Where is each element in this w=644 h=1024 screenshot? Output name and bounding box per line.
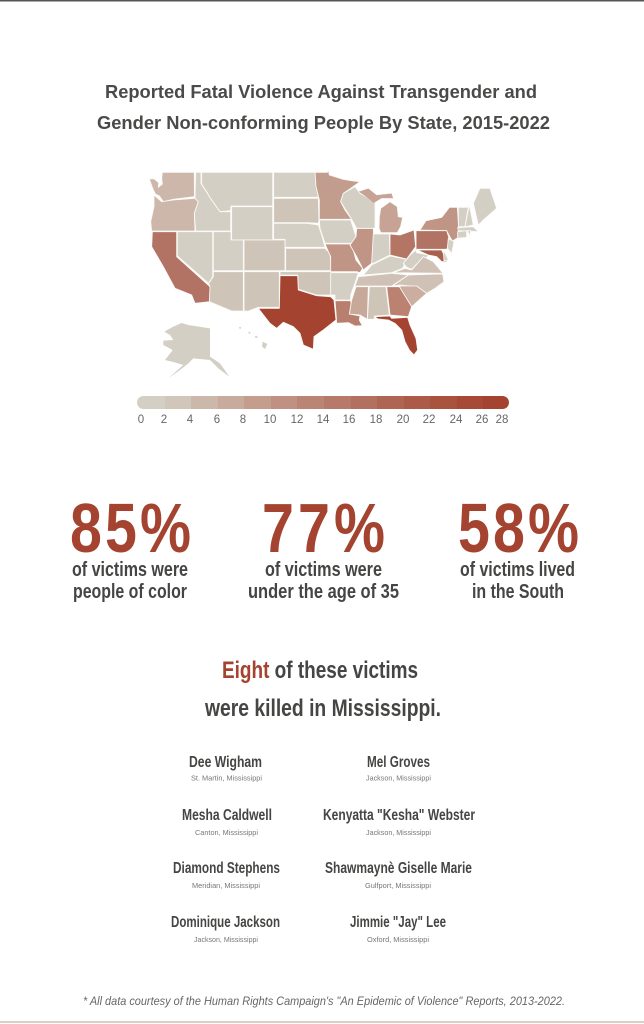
legend labels <box>138 414 508 426</box>
title <box>97 81 550 133</box>
victim: Diamond Stephens <box>173 860 280 890</box>
victim: Mesha Caldwell <box>182 807 272 837</box>
eastern states <box>315 169 497 355</box>
stat: 85%: people of color <box>73 581 187 603</box>
legend labels: 6 <box>214 414 220 426</box>
victim: Kenyatta Webster: Jackson, Mississippi <box>366 828 431 837</box>
victim: Shawmayne Giselle Marie: Shawmaynè Giselle Marie <box>325 860 472 877</box>
victim: Mel Groves: Jackson, Mississippi <box>366 774 431 782</box>
stat: 85%: 85% <box>70 489 191 567</box>
stat: 58%: 58% <box>458 489 579 567</box>
footnote: * All data courtesy of the Human Rights Campaign's "An Epidemic of Violence" Reports, 2013-2022. <box>83 994 565 1008</box>
legend labels: 10 <box>264 414 276 426</box>
title: Gender Non-conforming People By State, 2015-2022 <box>97 112 550 133</box>
victim: Dominique Jackson: Dominique Jackson <box>171 914 280 931</box>
victim: Shawmayne Giselle Marie <box>325 860 472 890</box>
victim: Dominique Jackson <box>171 914 280 944</box>
victim: Mel Groves <box>366 754 431 782</box>
stat: 58%: in the South <box>472 581 564 603</box>
legend labels: 28 <box>496 414 508 426</box>
legend labels: 20 <box>397 414 409 426</box>
victim: Kenyatta Webster: Kenyatta "Kesha" Webster <box>323 807 475 824</box>
list of victims <box>171 754 475 944</box>
heading: Mississippi victims: were killed in Mississippi. <box>204 695 441 722</box>
victim: Diamond Stephens: Meridian, Mississippi <box>192 881 260 890</box>
stat: 58% <box>458 489 579 603</box>
victim: Shawmayne Giselle Marie: Gulfport, Mississippi <box>365 881 431 890</box>
legend labels: 0 <box>138 414 144 426</box>
victim: Mesha Caldwell: Mesha Caldwell <box>182 807 272 824</box>
stat: 77%: under the age of 35 <box>248 581 399 603</box>
legend labels: 16 <box>343 414 355 426</box>
heading: Mississippi victims <box>204 657 441 722</box>
stat: 77%: 77% <box>262 489 385 567</box>
legend labels: 14 <box>317 414 330 426</box>
victim: Kenyatta Webster <box>323 807 475 837</box>
legend labels: 26 <box>476 414 488 426</box>
victim: Dee Wigham <box>189 754 262 782</box>
legend labels: 4 <box>187 414 194 426</box>
title: Reported Fatal Violence Against Transgender and <box>105 81 537 102</box>
western states <box>149 172 336 378</box>
victim: Jimmie Lee <box>350 914 446 944</box>
stat: 77%: of victims were <box>265 559 382 581</box>
legend labels: 18 <box>370 414 382 426</box>
stat: 85%: of victims were <box>72 559 188 581</box>
victim: Jimmie Lee: Jimmie "Jay" Lee <box>350 914 446 931</box>
legend labels: 2 <box>161 414 167 426</box>
legend labels: 22 <box>423 414 435 426</box>
legend labels: 12 <box>291 414 303 426</box>
legend labels: 24 <box>450 414 463 426</box>
victim: Mel Groves: Mel Groves <box>367 754 430 771</box>
stat: 77% <box>248 489 399 603</box>
victim: Mesha Caldwell: Canton, Mississippi <box>195 828 258 837</box>
legend labels: 8 <box>240 414 246 426</box>
heading: Mississippi victims: Eight of these victims <box>222 657 418 684</box>
victim: Dominique Jackson: Jackson, Mississippi <box>194 935 258 944</box>
victim: Dee Wigham: St. Martin, Mississippi <box>191 774 262 782</box>
victim: Diamond Stephens: Diamond Stephens <box>173 860 280 877</box>
legend: colour scale <box>137 396 509 426</box>
icon: Alaska <box>163 323 229 378</box>
stat: 58%: of victims lived <box>460 559 575 581</box>
victim: Jimmie Lee: Oxford, Mississippi <box>367 935 429 944</box>
icon: Hawaii <box>262 342 267 349</box>
stat: 85% <box>70 489 191 603</box>
choropleth map of US states <box>149 169 497 378</box>
victim: Dee Wigham: Dee Wigham <box>189 754 262 771</box>
